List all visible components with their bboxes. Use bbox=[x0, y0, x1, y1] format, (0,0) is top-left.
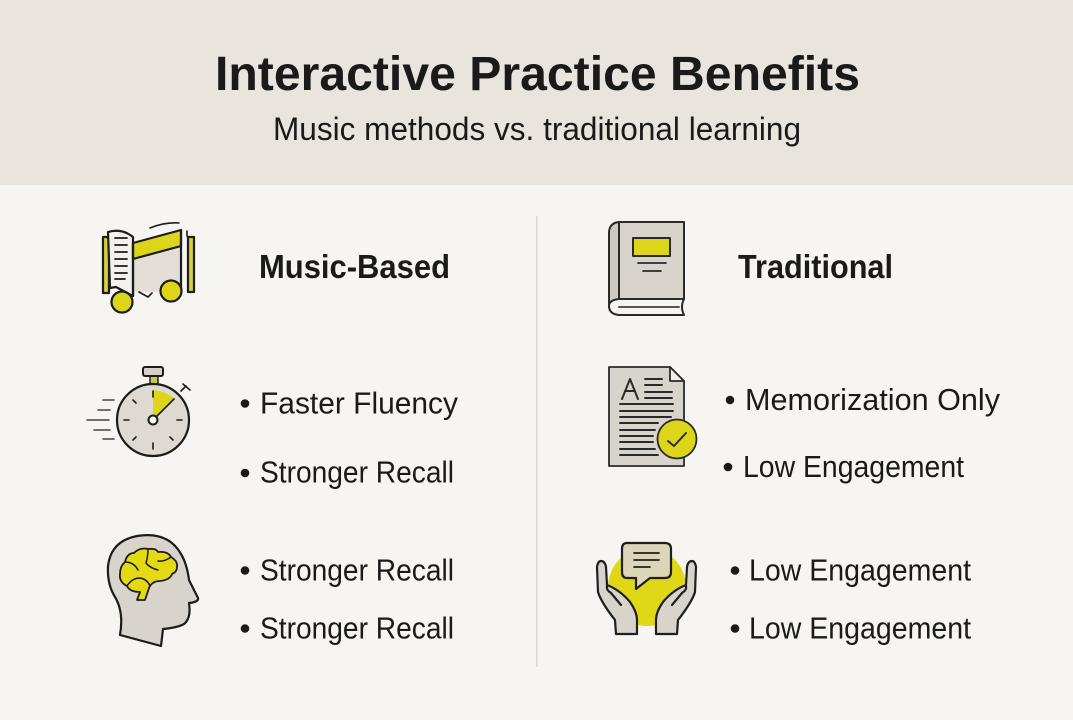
bullet list: recall: Stronger Recall bbox=[260, 552, 454, 588]
icon: document with check bbox=[609, 367, 696, 466]
bullet list: speed bbox=[241, 386, 458, 490]
heading: Music-Based: Music-Based bbox=[259, 248, 450, 285]
panel: traditional column bbox=[597, 222, 1000, 646]
bullet list: speed: Faster Fluency bbox=[260, 386, 458, 420]
panel: music-based column bbox=[87, 223, 458, 646]
icon: music note book bbox=[103, 223, 194, 312]
subtitle: Music methods vs. traditional learning bbox=[273, 111, 801, 147]
bullet list: speed: Stronger Recall bbox=[260, 454, 454, 490]
bullet list: recall bbox=[241, 552, 454, 646]
heading: Traditional: Traditional bbox=[738, 248, 893, 285]
icon: closed book bbox=[609, 222, 684, 315]
bullet list: memorization: Low Engagement bbox=[743, 449, 964, 484]
bullet list: recall: Stronger Recall bbox=[260, 610, 454, 646]
bullet list: engagement bbox=[731, 552, 971, 646]
bullet list: engagement: Low Engagement bbox=[749, 552, 971, 588]
title: Interactive Practice Benefits bbox=[215, 47, 860, 101]
icon: stopwatch bbox=[87, 367, 190, 456]
icon: head with brain bbox=[108, 535, 198, 646]
bullet list: memorization bbox=[724, 382, 1000, 484]
bullet list: memorization: Memorization Only bbox=[745, 382, 1000, 417]
icon: hands with speech bubble bbox=[597, 543, 696, 634]
header band bbox=[0, 0, 1073, 185]
bullet list: engagement: Low Engagement bbox=[749, 610, 971, 646]
